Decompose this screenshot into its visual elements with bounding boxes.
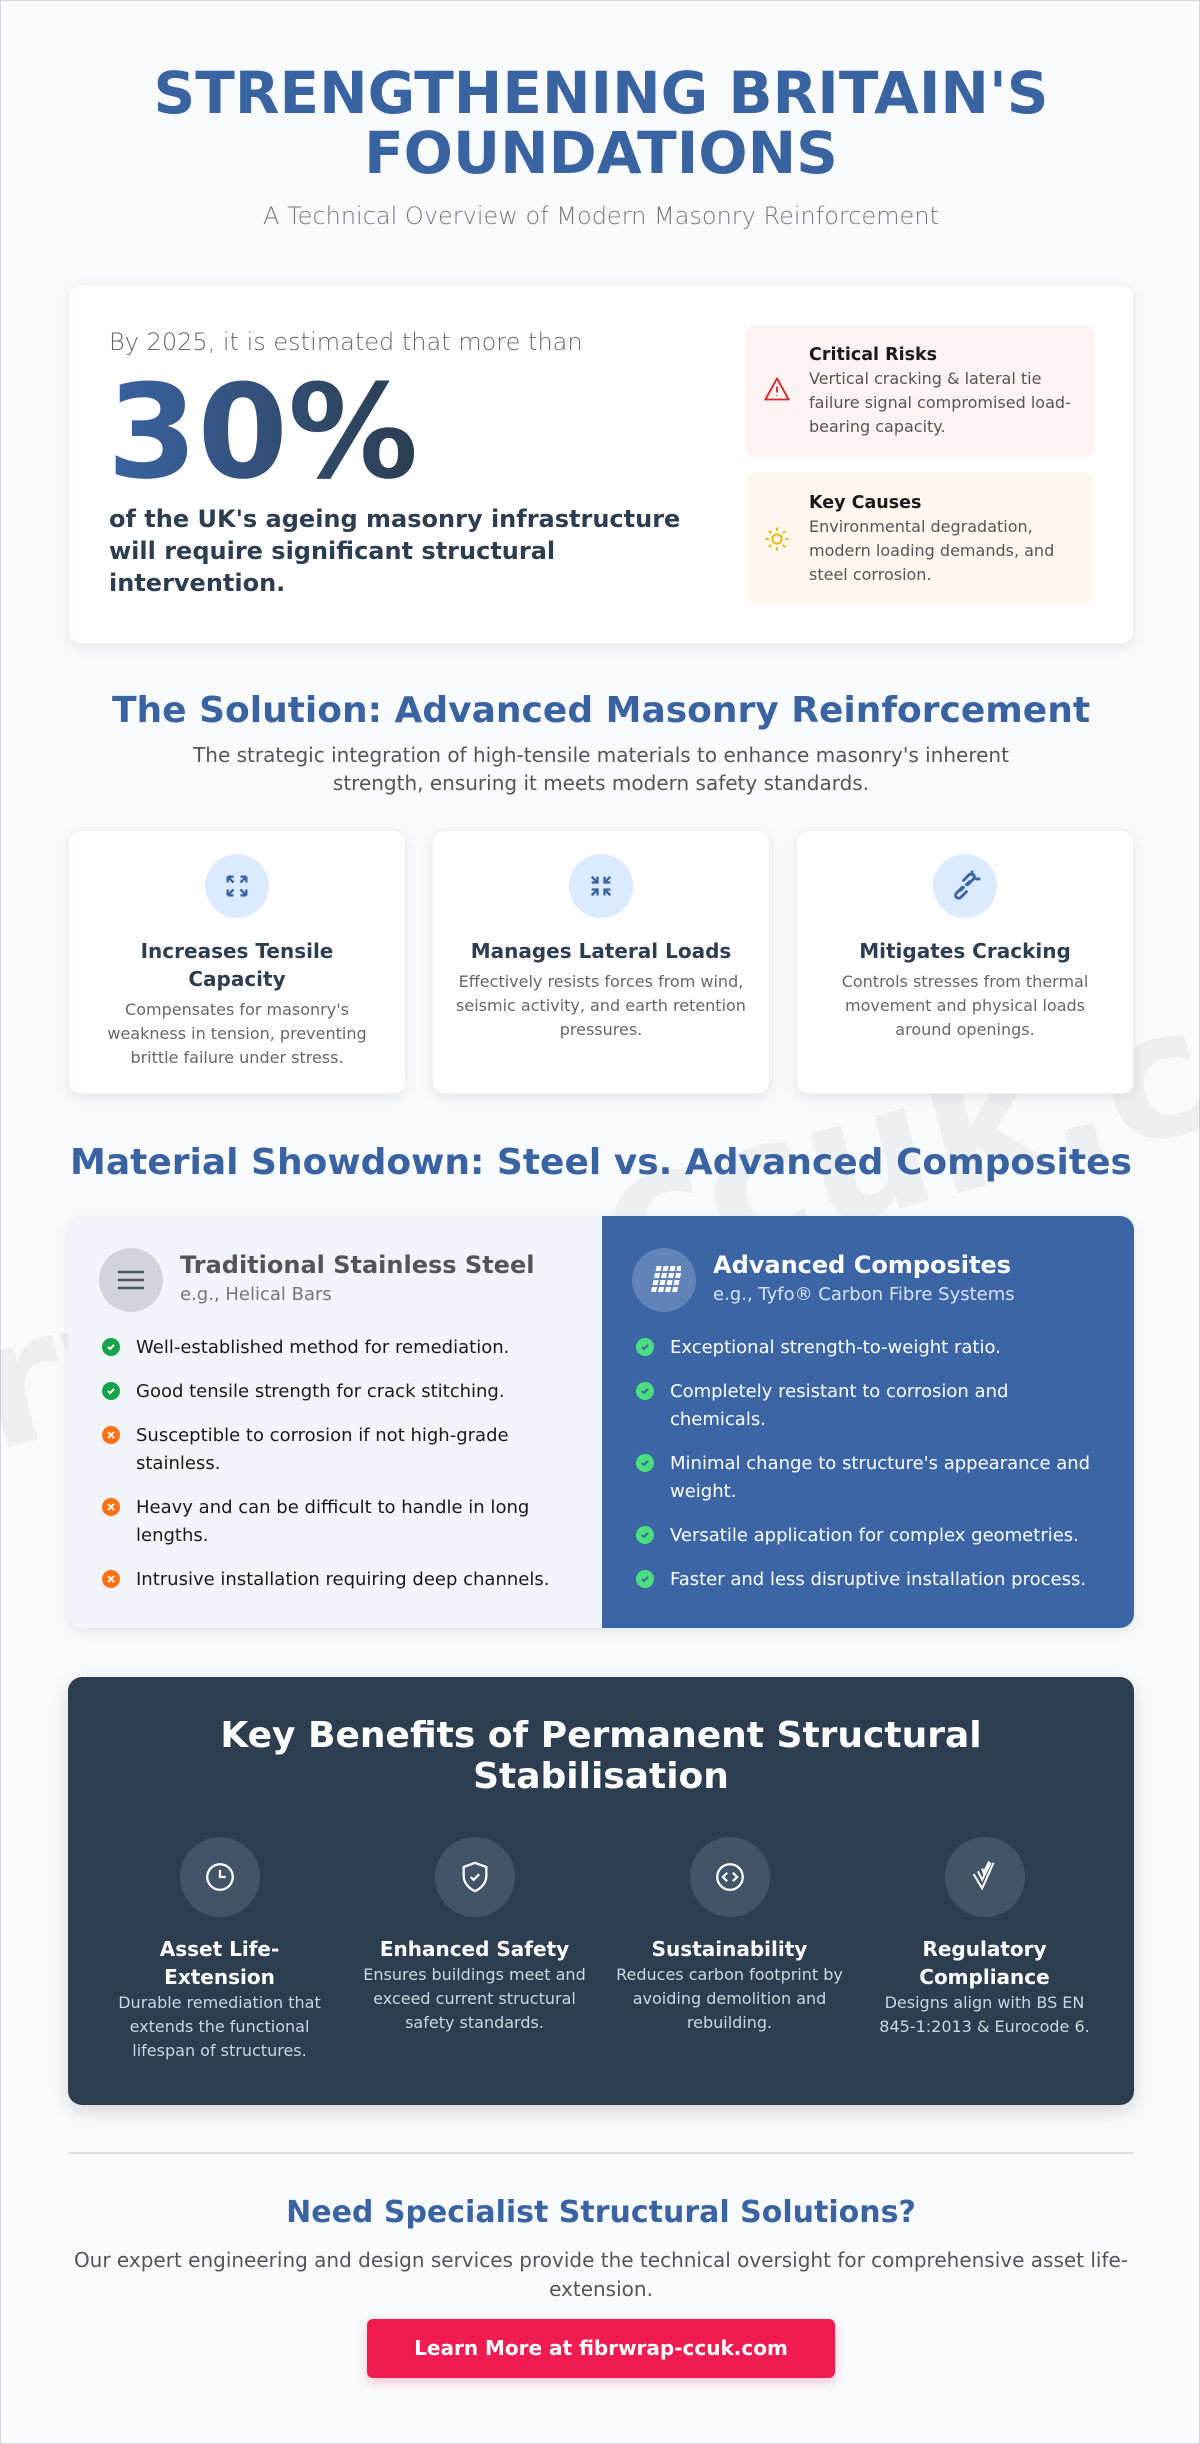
list: composite advantages: Completely resistant to corrosion and chemicals.: [670, 1381, 1008, 1430]
icon: warning: [764, 378, 790, 400]
panel: lateral loads: [432, 830, 770, 1094]
benefit: asset life: [118, 1837, 321, 2060]
text: cta description: Our expert engineering and design services provide the technical oversight for comprehensive asset life-extension.: [74, 2248, 1128, 2301]
list: steel pros and cons: [102, 1337, 549, 1590]
callout: key causes: Key Causes: [809, 493, 921, 513]
icon: clock: [180, 1837, 260, 1917]
big number: 30%: [107, 356, 418, 508]
benefit: safety: Enhanced Safety: [380, 1937, 569, 1961]
statement: of the UK's ageing masonry infrastructure will require significant structural intervention.: [109, 505, 680, 597]
callout: critical risks: Critical Risks: [809, 345, 937, 365]
list: composite advantages: Exceptional strength-to-weight ratio.: [670, 1337, 1001, 1358]
list: steel pros and cons: Susceptible to corrosion if not high-grade stainless.: [136, 1425, 509, 1474]
callout: critical risks: [746, 325, 1094, 457]
panel: cracking: Controls stresses from thermal movement and physical loads around openings.: [842, 972, 1088, 1039]
icon: steel bars: [99, 1248, 163, 1312]
subtitle: A Technical Overview of Modern Masonry Reinforcement: [263, 202, 939, 230]
benefit: safety: Ensures buildings meet and exceed current structural safety standards.: [363, 1965, 586, 2032]
heading: the solution: The Solution: Advanced Masonry Reinforcement: [112, 690, 1090, 731]
heading: key benefits: Stabilisation: [473, 1756, 729, 1797]
list: composite advantages: Versatile application for complex geometries.: [670, 1525, 1079, 1546]
callout: critical risks: Vertical cracking & lateral tie failure signal compromised load-bearing capacity.: [809, 369, 1071, 436]
icon: sun: [765, 527, 789, 551]
panel: tensile capacity: [68, 830, 406, 1094]
list: composite advantages: Faster and less disruptive installation process.: [670, 1569, 1086, 1590]
text: solution intro: The strategic integration of high-tensile materials to enhance masonry's inherent strength, ensuring it meets modern safety standards.: [193, 743, 1009, 795]
heading: key benefits: Key Benefits of Permanent Structural: [220, 1715, 982, 1756]
list: composite advantages: Minimal change to structure's appearance and weight.: [670, 1453, 1090, 1502]
benefit: compliance: Designs align with BS EN 845-1:2013 & Eurocode 6.: [879, 1993, 1090, 2036]
benefit: sustainability: Reduces carbon footprint by avoiding demolition and rebuilding.: [616, 1965, 843, 2032]
panel: key benefits: [68, 1677, 1134, 2105]
panel: lateral loads: Manages Lateral Loads: [471, 939, 731, 963]
intro text: By 2025, it is estimated that more than: [109, 328, 583, 356]
panel: stainless steel: [68, 1216, 602, 1628]
icon: expand: [205, 854, 269, 918]
icon: compress: [569, 854, 633, 918]
list: composite advantages: [636, 1337, 1090, 1590]
benefit: asset life: Durable remediation that extends the functional lifespan of structures.: [118, 1993, 321, 2060]
benefit: asset life: Asset Life-Extension: [160, 1937, 279, 1989]
benefit: safety: [363, 1837, 586, 2032]
icon: carbon grid: [632, 1248, 696, 1312]
button: learn more: Learn More at fibrwrap-ccuk.com: [414, 2336, 788, 2360]
panel: composites: Advanced Composites: [713, 1251, 1011, 1279]
panel: tensile capacity: Compensates for masonry's weakness in tension, preventing brittle failure under stress.: [107, 1000, 367, 1067]
list: steel pros and cons: Heavy and can be difficult to handle in long lengths.: [136, 1497, 529, 1546]
icon: checks: [944, 1837, 1024, 1917]
heading: call to action: Need Specialist Structural Solutions?: [286, 2195, 916, 2230]
callout: key causes: Environmental degradation, modern loading demands, and steel corrosion.: [809, 517, 1054, 584]
heading: key benefits: [220, 1715, 982, 1797]
icon: broken link: [933, 854, 997, 918]
title: STRENGTHENING BRITAIN'S: [154, 59, 1048, 127]
heading: material showdown: Material Showdown: Steel vs. Advanced Composites: [70, 1142, 1132, 1183]
icon: recycle: [690, 1837, 770, 1917]
benefit: compliance: Regulatory Compliance: [919, 1937, 1050, 1989]
title: [154, 59, 1048, 187]
panel: hero statistic: [68, 284, 1134, 644]
callout: key causes: [746, 473, 1094, 605]
list: steel pros and cons: Well-established method for remediation.: [136, 1337, 509, 1358]
icon: shield: [434, 1837, 514, 1917]
panel: lateral loads: Effectively resists forces from wind, seismic activity, and earth retention pressures.: [456, 972, 746, 1039]
panel: stainless steel: Traditional Stainless Steel: [180, 1251, 534, 1279]
list: steel pros and cons: Intrusive installation requiring deep channels.: [136, 1569, 549, 1590]
panel: cracking: Mitigates Cracking: [859, 939, 1071, 963]
benefit: sustainability: Sustainability: [652, 1937, 807, 1961]
button: learn more: [367, 2319, 835, 2378]
list: steel pros and cons: Good tensile strength for crack stitching.: [136, 1381, 505, 1402]
panel: comparison: [68, 1216, 1134, 1628]
panel: composites: e.g., Tyfo® Carbon Fibre Systems: [713, 1284, 1015, 1305]
panel: composites: [602, 1216, 1134, 1628]
panel: tensile capacity: Increases Tensile Capacity: [141, 939, 333, 991]
title: FOUNDATIONS: [364, 119, 838, 187]
panel: cracking: [796, 830, 1134, 1094]
benefit: compliance: [879, 1837, 1090, 2036]
panel: stainless steel: e.g., Helical Bars: [180, 1284, 332, 1305]
benefit: sustainability: [616, 1837, 843, 2032]
